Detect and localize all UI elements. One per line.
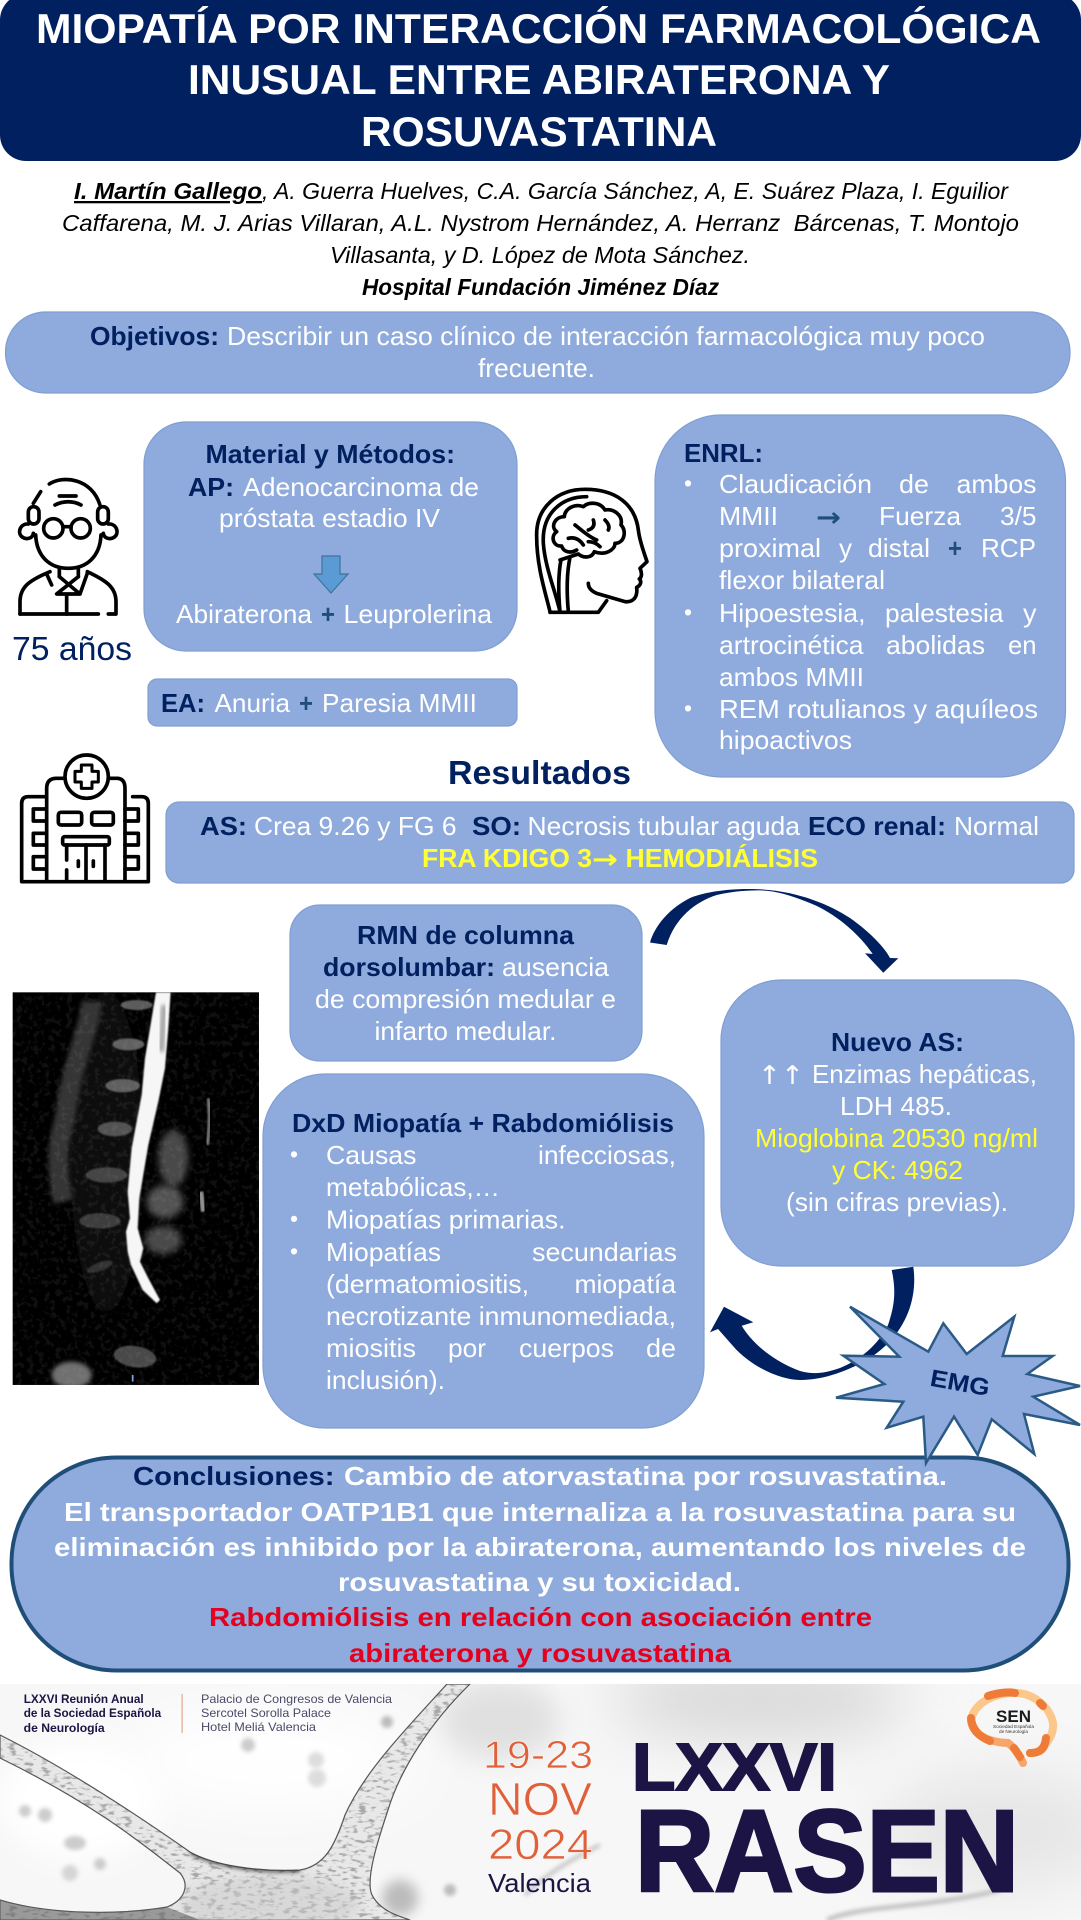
panel: analítica y resultados: HEMODIÁLISIS	[626, 843, 818, 873]
congress name	[636, 1743, 1013, 1894]
panel: RMN de columna	[290, 905, 642, 1061]
panel: material y métodos: Adenocarcinoma de	[243, 472, 479, 502]
neuron illustration	[0, 1684, 480, 1920]
authors and hospital: I. Martín Gallego	[74, 178, 262, 204]
bullet list: ENRL findings: Claudicación	[719, 469, 872, 499]
panel: conclusiones: eliminación es inhibido por la abiraterona, aumentando los niveles de	[54, 1532, 1026, 1562]
callout: EMG starburst	[836, 1307, 1080, 1463]
logo: SEN brain: SEN	[996, 1707, 1031, 1726]
panel: material y métodos: Leuprolerina	[344, 599, 493, 629]
panel: analítica y resultados: AS:	[200, 811, 247, 841]
bullet list: differential causes: secundarias	[532, 1237, 677, 1267]
bullet list: ENRL findings: ambos	[956, 469, 1036, 499]
congress details text: de la Sociedad Española	[24, 1706, 162, 1720]
bullet list: ENRL findings: flexor bilateral	[719, 565, 885, 595]
panel: material y métodos: Material y Métodos:	[206, 439, 455, 469]
bullet list: differential causes: (dermatomiositis,	[326, 1269, 529, 1299]
panel: analítica y resultados: SO:	[472, 811, 521, 841]
bullet list: ENRL findings: distal	[868, 533, 930, 563]
panel: analítica y resultados: ECO renal:	[808, 811, 946, 841]
congress dates	[486, 1740, 592, 1892]
panel: enfermedad actual: EA:	[161, 688, 205, 718]
bullet list: differential causes: miositis	[326, 1333, 416, 1363]
bullet list: ENRL findings: artrocinética	[719, 630, 864, 660]
bullet list: differential causes: necrotizante inmunomediada,	[326, 1301, 676, 1331]
bullet list: differential causes: Causas	[326, 1140, 416, 1170]
title text	[36, 4, 1041, 155]
congress details text: Hotel Meliá Valencia	[201, 1720, 316, 1734]
bullet list: ENRL findings: proximal	[719, 533, 821, 563]
arrow: nuevo AS to diagnóstico	[710, 1267, 914, 1380]
callout: EMG starburst: EMG	[928, 1365, 992, 1402]
panel: conclusiones: Rabdomiólisis en relación con asociación entre	[209, 1602, 872, 1632]
panel: RMN de columna: de compresión medular e	[315, 984, 616, 1014]
heading: resultados: Resultados	[448, 754, 631, 791]
panel: conclusiones: Conclusiones:	[133, 1461, 334, 1491]
panel: nuevo AS: LDH 485.	[840, 1091, 952, 1121]
congress details text	[24, 1692, 392, 1735]
bullet list: differential causes: Miopatías	[326, 1237, 441, 1267]
age label: 75 años	[12, 630, 132, 667]
panel: conclusiones: Cambio de atorvastatina por rosuvastatina.	[344, 1461, 947, 1491]
bullet list: ENRL findings: ambos MMII	[719, 662, 864, 692]
panel: analítica y resultados: FRA KDIGO 3	[422, 843, 592, 873]
bullet list: ENRL findings: •	[684, 695, 692, 721]
panel: nuevo AS: (sin cifras previas).	[786, 1187, 1008, 1217]
panel: conclusiones: abiraterona y rosuvastatina	[349, 1638, 732, 1668]
logo: SEN brain: de Neurología	[999, 1729, 1028, 1734]
MRI spine image	[13, 992, 259, 1388]
bullet list: differential causes: •	[290, 1141, 298, 1167]
congress dates: Valencia	[488, 1868, 592, 1898]
bullet list: differential causes: inclusión).	[326, 1365, 445, 1395]
congress dates: 19-23	[483, 1734, 593, 1777]
congress name: RASEN	[635, 1786, 1019, 1916]
title text: ROSUVASTATINA	[361, 108, 717, 155]
panel: enfermedad actual	[148, 679, 517, 726]
panel: RMN de columna: ausencia	[502, 952, 610, 982]
congress name: LXXVI	[632, 1730, 837, 1805]
panel: nuevo AS: Nuevo AS:	[831, 1027, 964, 1057]
authors and hospital: Villasanta, y D. López de Mota Sánchez.	[330, 242, 750, 268]
logo: SEN brain: Sociedad Española	[993, 1724, 1035, 1729]
congress dates: NOV	[488, 1773, 592, 1825]
bullet list: differential causes: cuerpos	[519, 1333, 614, 1363]
icon: head with brain	[537, 489, 647, 612]
panel: RMN de columna: infarto medular.	[374, 1016, 556, 1046]
title banner	[0, 0, 1081, 161]
panel: RMN de columna: dorsolumbar:	[323, 952, 495, 982]
bullet list: differential causes: miopatía	[574, 1269, 677, 1299]
panel: material y métodos: AP:	[188, 472, 234, 502]
panel: conclusiones	[12, 1458, 1068, 1670]
authors and hospital: , A. Guerra Huelves, C.A. García Sánchez, A, E. Suárez Plaza, I. Eguilior	[262, 178, 1009, 204]
panel: nuevo AS: y CK: 4962	[832, 1155, 963, 1185]
authors and hospital: Caffarena, M. J. Arias Villaran, A.L. Nystrom Hernández, A. Herranz Bárcenas, T. Montojo	[62, 210, 1019, 236]
congress dates: 2024	[488, 1821, 593, 1869]
arrow: RMN to nuevo AS	[650, 889, 898, 973]
bullet list: ENRL findings: de	[899, 469, 929, 499]
bullet list: ENRL findings: RCP	[981, 533, 1036, 563]
bullet list: ENRL findings: y	[839, 533, 852, 563]
panel: ENRL: ENRL:	[684, 438, 763, 468]
bullet list: ENRL findings: •	[684, 599, 692, 625]
footer banner: congress	[0, 1660, 1081, 1920]
panel: analítica y resultados: Normal	[954, 811, 1039, 841]
panel: material y métodos: próstata estadio IV	[219, 503, 441, 533]
bullet list: ENRL findings: MMII	[719, 501, 778, 531]
panel: enfermedad actual: Anuria	[214, 688, 291, 718]
panel: objetivos: Describir un caso clínico de interacción farmacológica muy poco	[227, 321, 985, 351]
bullet list: ENRL findings: abolidas	[886, 630, 985, 660]
panel: nuevo AS: Enzimas hepáticas,	[812, 1059, 1037, 1089]
authors and hospital: Hospital Fundación Jiménez Díaz	[362, 274, 719, 300]
title text: INUSUAL ENTRE ABIRATERONA Y	[188, 56, 890, 103]
bullet list: differential causes: infecciosas,	[538, 1140, 676, 1170]
bullet list: ENRL findings	[684, 469, 1038, 755]
bullet list: differential causes: •	[290, 1206, 298, 1232]
panel: material y métodos: +	[321, 599, 335, 629]
panel: enfermedad actual: +	[299, 688, 313, 718]
panel: nuevo AS: Mioglobina 20530 ng/ml	[755, 1123, 1038, 1153]
title text: MIOPATÍA POR INTERACCIÓN FARMACOLÓGICA	[36, 4, 1041, 52]
bullet list: ENRL findings: Hipoestesia,	[719, 598, 866, 628]
bullet list: ENRL findings: en	[1008, 630, 1036, 660]
panel: objetivos: frecuente.	[478, 353, 595, 383]
panel: ENRL	[655, 415, 1066, 777]
panel: material y métodos	[144, 422, 517, 651]
bullet list: ENRL findings: Fuerza	[879, 501, 962, 531]
panel: objetivos	[6, 312, 1070, 393]
panel: objetivos: Objetivos:	[90, 321, 219, 351]
panel: material y métodos: Abiraterona	[176, 599, 313, 629]
bullet list: ENRL findings: →	[816, 503, 841, 533]
bullet list: differential causes: metabólicas,…	[326, 1172, 500, 1202]
panel: diagnóstico diferencial: DxD Miopatía + Rabdomiólisis	[292, 1108, 674, 1138]
icon: elderly patient	[20, 480, 117, 614]
bullet list: ENRL findings: 3/5	[1000, 501, 1036, 531]
bullet list: differential causes: de	[646, 1333, 676, 1363]
icon: hospital	[22, 755, 148, 882]
panel: conclusiones: El transportador OATP1B1 que internaliza a la rosuvastatina para su	[64, 1497, 1016, 1527]
bullet list: differential causes	[290, 1140, 677, 1395]
bullet list: differential causes: •	[290, 1238, 298, 1264]
logo: SEN brain	[971, 1692, 1053, 1763]
bullet list: ENRL findings: y	[1023, 598, 1036, 628]
panel: diagnóstico diferencial	[263, 1074, 704, 1428]
bullet list: ENRL findings: palestesia	[885, 598, 1004, 628]
panel: conclusiones: rosuvastatina y su toxicidad.	[338, 1567, 741, 1597]
panel: analítica y resultados: Necrosis tubular aguda	[528, 811, 801, 841]
panel: enfermedad actual: Paresia MMII	[322, 688, 477, 718]
bullet list: ENRL findings: •	[684, 470, 692, 496]
bullet list: ENRL findings: REM rotulianos y aquíleos	[719, 694, 1038, 724]
panel: analítica y resultados: Crea 9.26 y FG 6	[254, 811, 456, 841]
panel: analítica y resultados	[166, 802, 1074, 883]
bullet list: ENRL findings: +	[948, 533, 962, 563]
bullet list: ENRL findings: hipoactivos	[719, 725, 852, 755]
panel: RMN de columna: RMN de columna	[357, 920, 575, 950]
panel: analítica y resultados: →	[592, 845, 618, 875]
bullet list: differential causes: Miopatías primarias.	[326, 1204, 566, 1234]
panel: nuevo AS: ↑↑	[758, 1061, 804, 1091]
congress details text: de Neurología	[24, 1721, 105, 1735]
bullet list: differential causes: por	[448, 1333, 486, 1363]
icon: down arrow	[314, 556, 348, 593]
congress details text: Sercotel Sorolla Palace	[201, 1706, 331, 1720]
authors and hospital	[62, 178, 1019, 300]
congress details text: LXXVI Reunión Anual	[24, 1692, 144, 1706]
panel: nuevo AS	[721, 980, 1074, 1266]
congress details text: Palacio de Congresos de Valencia	[201, 1692, 392, 1706]
